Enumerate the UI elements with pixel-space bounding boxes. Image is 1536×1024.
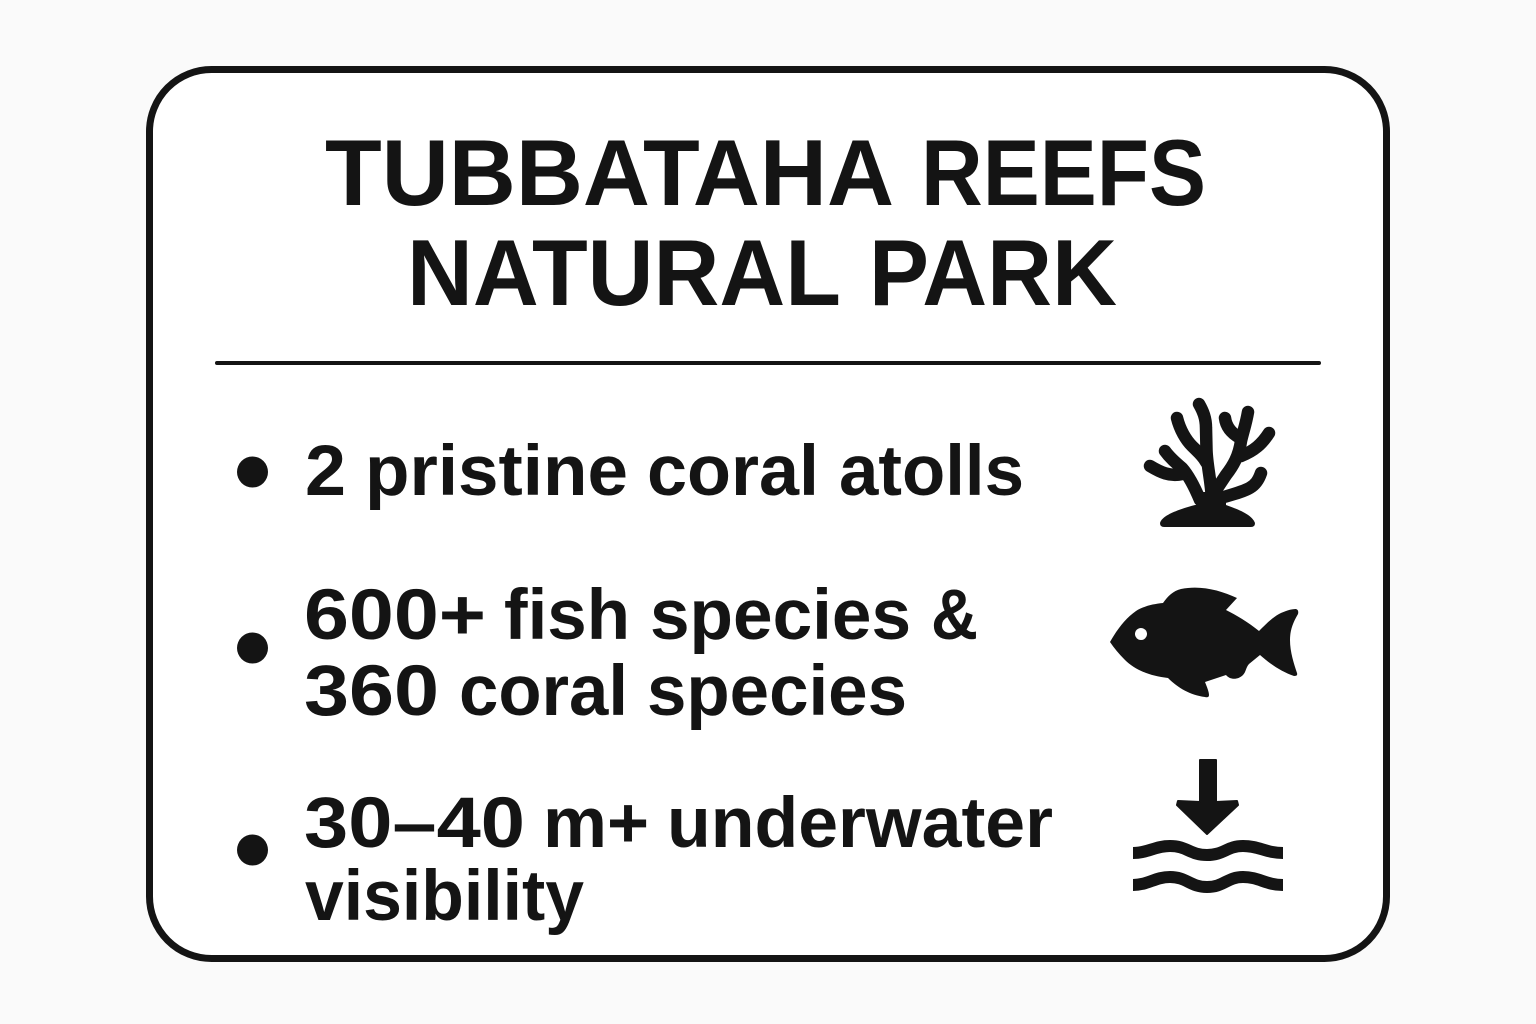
panel: sign card xyxy=(150,70,1386,958)
text: species: coral xyxy=(459,652,628,731)
text: coral atolls: coral xyxy=(647,432,819,511)
text: visibility: underwater xyxy=(667,784,1053,863)
text: visibility xyxy=(304,784,1053,936)
list item: coral atolls xyxy=(237,432,1024,511)
title: TUBBATAHA xyxy=(325,120,894,225)
text: species: 600+ xyxy=(304,576,486,655)
text: species xyxy=(304,576,978,731)
text: visibility: 30–40 xyxy=(304,784,525,863)
icon: coral xyxy=(1150,404,1269,527)
text: coral atolls: pristine xyxy=(365,432,628,511)
text: visibility: m+ xyxy=(543,784,649,863)
text: species: species xyxy=(650,576,911,655)
text: species: fish xyxy=(504,576,630,655)
title: NATURAL xyxy=(407,220,841,325)
icon: depth arrow and waves xyxy=(1133,760,1283,887)
text: coral atolls: atolls xyxy=(839,432,1024,511)
text: species: & xyxy=(931,576,978,655)
title: PARK xyxy=(869,220,1117,325)
text: visibility: visibility xyxy=(305,857,584,936)
bullet xyxy=(237,834,268,866)
title: REEFS xyxy=(921,120,1206,225)
bullet xyxy=(237,456,268,488)
text: coral atolls: 2 xyxy=(305,432,346,511)
list item: species xyxy=(237,576,978,731)
icon: fish xyxy=(1110,588,1298,697)
text: species: 360 xyxy=(304,652,439,731)
text: species: species xyxy=(647,652,907,731)
title xyxy=(325,120,1206,325)
list item: visibility xyxy=(237,784,1053,936)
text: coral atolls xyxy=(305,432,1024,511)
bullet xyxy=(237,632,268,664)
